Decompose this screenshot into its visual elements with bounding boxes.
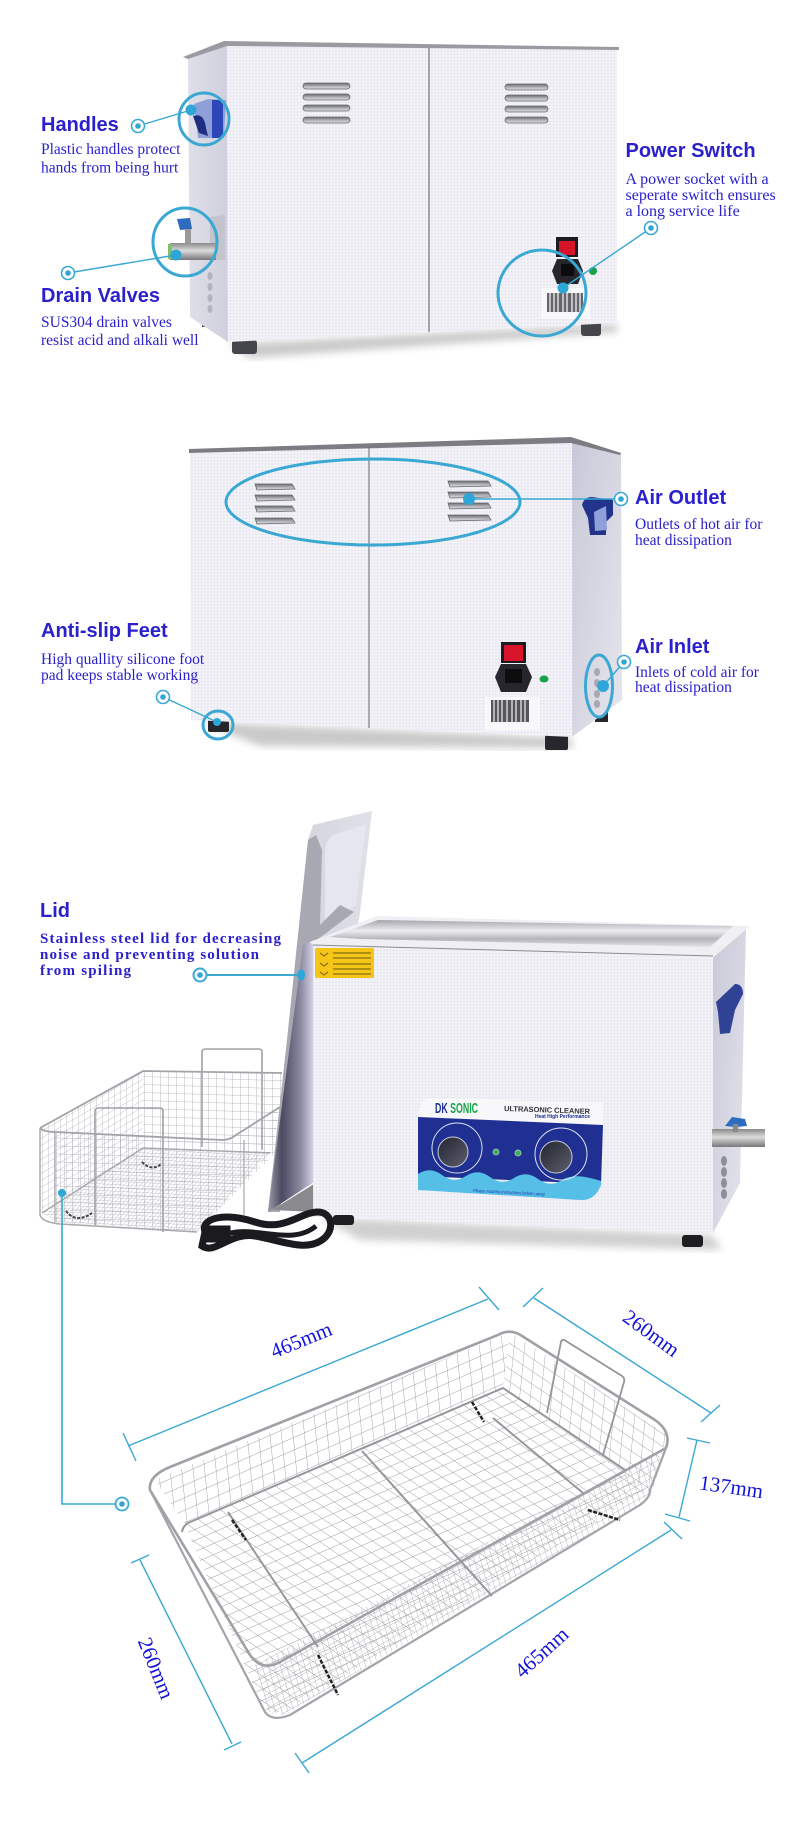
brand: DK SONIC <box>435 1100 478 1117</box>
text: Air Outlet description: Outlets of hot air for <box>635 516 763 533</box>
handle <box>582 497 613 535</box>
tank side <box>713 928 746 1233</box>
text: Air Inlet description: Inlets of cold air for <box>635 664 760 681</box>
control panel <box>418 1098 603 1200</box>
basket clips <box>66 1162 161 1218</box>
heading: Power Switch: Power Switch <box>626 140 756 162</box>
drain valve <box>712 1117 765 1147</box>
tank rim <box>310 916 750 958</box>
text: Drain Valves description: resist acid and alkali well <box>41 332 199 349</box>
text: Power Switch description: seperate switch ensures <box>626 187 776 204</box>
blue handle <box>716 984 743 1034</box>
tank front <box>313 943 713 1233</box>
text: Handles description <box>41 141 181 176</box>
dimension: top width: 260mm <box>618 1305 684 1362</box>
cleaner feet <box>202 318 601 354</box>
text: Lid description: Stainless steel lid for decreasing <box>40 931 282 947</box>
drain valve <box>168 215 225 260</box>
heading: Drain Valves: Drain Valves <box>41 285 160 307</box>
dimension: height <box>665 1438 765 1521</box>
text: Lid description: noise and preventing solution <box>40 947 260 963</box>
black ties <box>232 1402 620 1695</box>
panel: tank with lid, control panel and cord <box>202 811 765 1250</box>
callout: Air Inlet <box>586 636 760 717</box>
power cord <box>202 1212 331 1248</box>
vents <box>255 481 491 524</box>
text: Anti-slip Feet description <box>41 651 205 684</box>
callout: Drain Valves <box>41 208 217 349</box>
text: Drain Valves description: SUS304 drain valves <box>41 314 172 331</box>
panel: wire basket with dimensions <box>123 1287 765 1773</box>
heading: Handles: Handles <box>41 114 119 136</box>
basket handles <box>95 1049 262 1232</box>
text: Power Switch description <box>626 171 776 220</box>
side air holes <box>721 1156 727 1199</box>
control panel: Please read the instructions before using! <box>473 1188 545 1197</box>
heading: Lid: Lid <box>40 900 70 922</box>
heading: Anti-slip Feet: Anti-slip Feet <box>41 620 168 642</box>
indicator lights <box>493 1149 521 1156</box>
stainless lid <box>268 811 372 1212</box>
panel: rear view with air vents and feet <box>189 437 622 750</box>
text: Handles description: Plastic handles protect <box>41 141 181 158</box>
callout: Air Outlet <box>226 459 763 549</box>
basket walls and floor <box>155 1332 668 1715</box>
text: Handles description: hands from being hurt <box>41 160 179 176</box>
text: Drain Valves description <box>41 314 199 349</box>
dimension: top width <box>523 1288 720 1422</box>
callout: Power Switch <box>498 140 776 336</box>
text: Air Inlet description <box>635 664 760 696</box>
basket handle <box>547 1340 624 1455</box>
dimension: bottom length <box>295 1522 682 1773</box>
dimension: height: 137mm <box>698 1470 765 1503</box>
text: Air Outlet description <box>635 516 763 549</box>
product name: ULTRASONIC CLEANER <box>504 1104 591 1116</box>
text: Power Switch description: A power socket with a <box>626 171 769 188</box>
side air holes <box>594 668 600 708</box>
text: Power Switch description: a long service life <box>626 203 740 220</box>
text: Air Inlet description: heat dissipation <box>635 679 732 696</box>
feet <box>333 1215 703 1247</box>
callout: Lid <box>40 900 305 982</box>
callout: Handles <box>41 93 229 176</box>
heading: Air Inlet: Air Inlet <box>635 636 710 658</box>
text: Anti-slip Feet description: pad keeps stable working <box>41 667 198 684</box>
barcode <box>485 697 540 730</box>
heading: Air Outlet: Air Outlet <box>635 487 726 509</box>
text: Lid description: from spiling <box>40 963 132 979</box>
warning label <box>315 948 374 978</box>
basket rim <box>150 1332 668 1666</box>
right knob <box>535 1128 587 1180</box>
dimension: bottom length: 465mm <box>510 1622 573 1683</box>
dimension: top length: 465mm <box>267 1317 335 1363</box>
text: Air Outlet description: heat dissipation <box>635 532 732 549</box>
power switch and socket <box>495 642 548 692</box>
vents <box>303 83 548 123</box>
left knob <box>432 1123 482 1173</box>
dimension: bottom width <box>131 1555 241 1750</box>
handle <box>193 99 226 138</box>
barcode <box>541 288 590 319</box>
panel: rear view with handles, drain valve and power switch <box>168 41 619 358</box>
floor frame <box>182 1388 625 1647</box>
basket base <box>150 1448 666 1718</box>
side air holes <box>208 272 212 313</box>
callout: Anti-slip Feet <box>41 620 233 739</box>
connector: basket callout <box>58 1189 128 1510</box>
text: Lid description <box>40 931 282 979</box>
cleaner feet <box>208 712 608 750</box>
tagline: Heat High Performance <box>535 1114 590 1120</box>
dimension: top length <box>123 1287 499 1461</box>
text: Anti-slip Feet description: High quallity silicone foot <box>41 651 205 668</box>
panel: basket beside the lid <box>40 1049 282 1232</box>
power switch and socket <box>552 237 597 284</box>
dimension: bottom width: 260mm <box>133 1634 179 1702</box>
